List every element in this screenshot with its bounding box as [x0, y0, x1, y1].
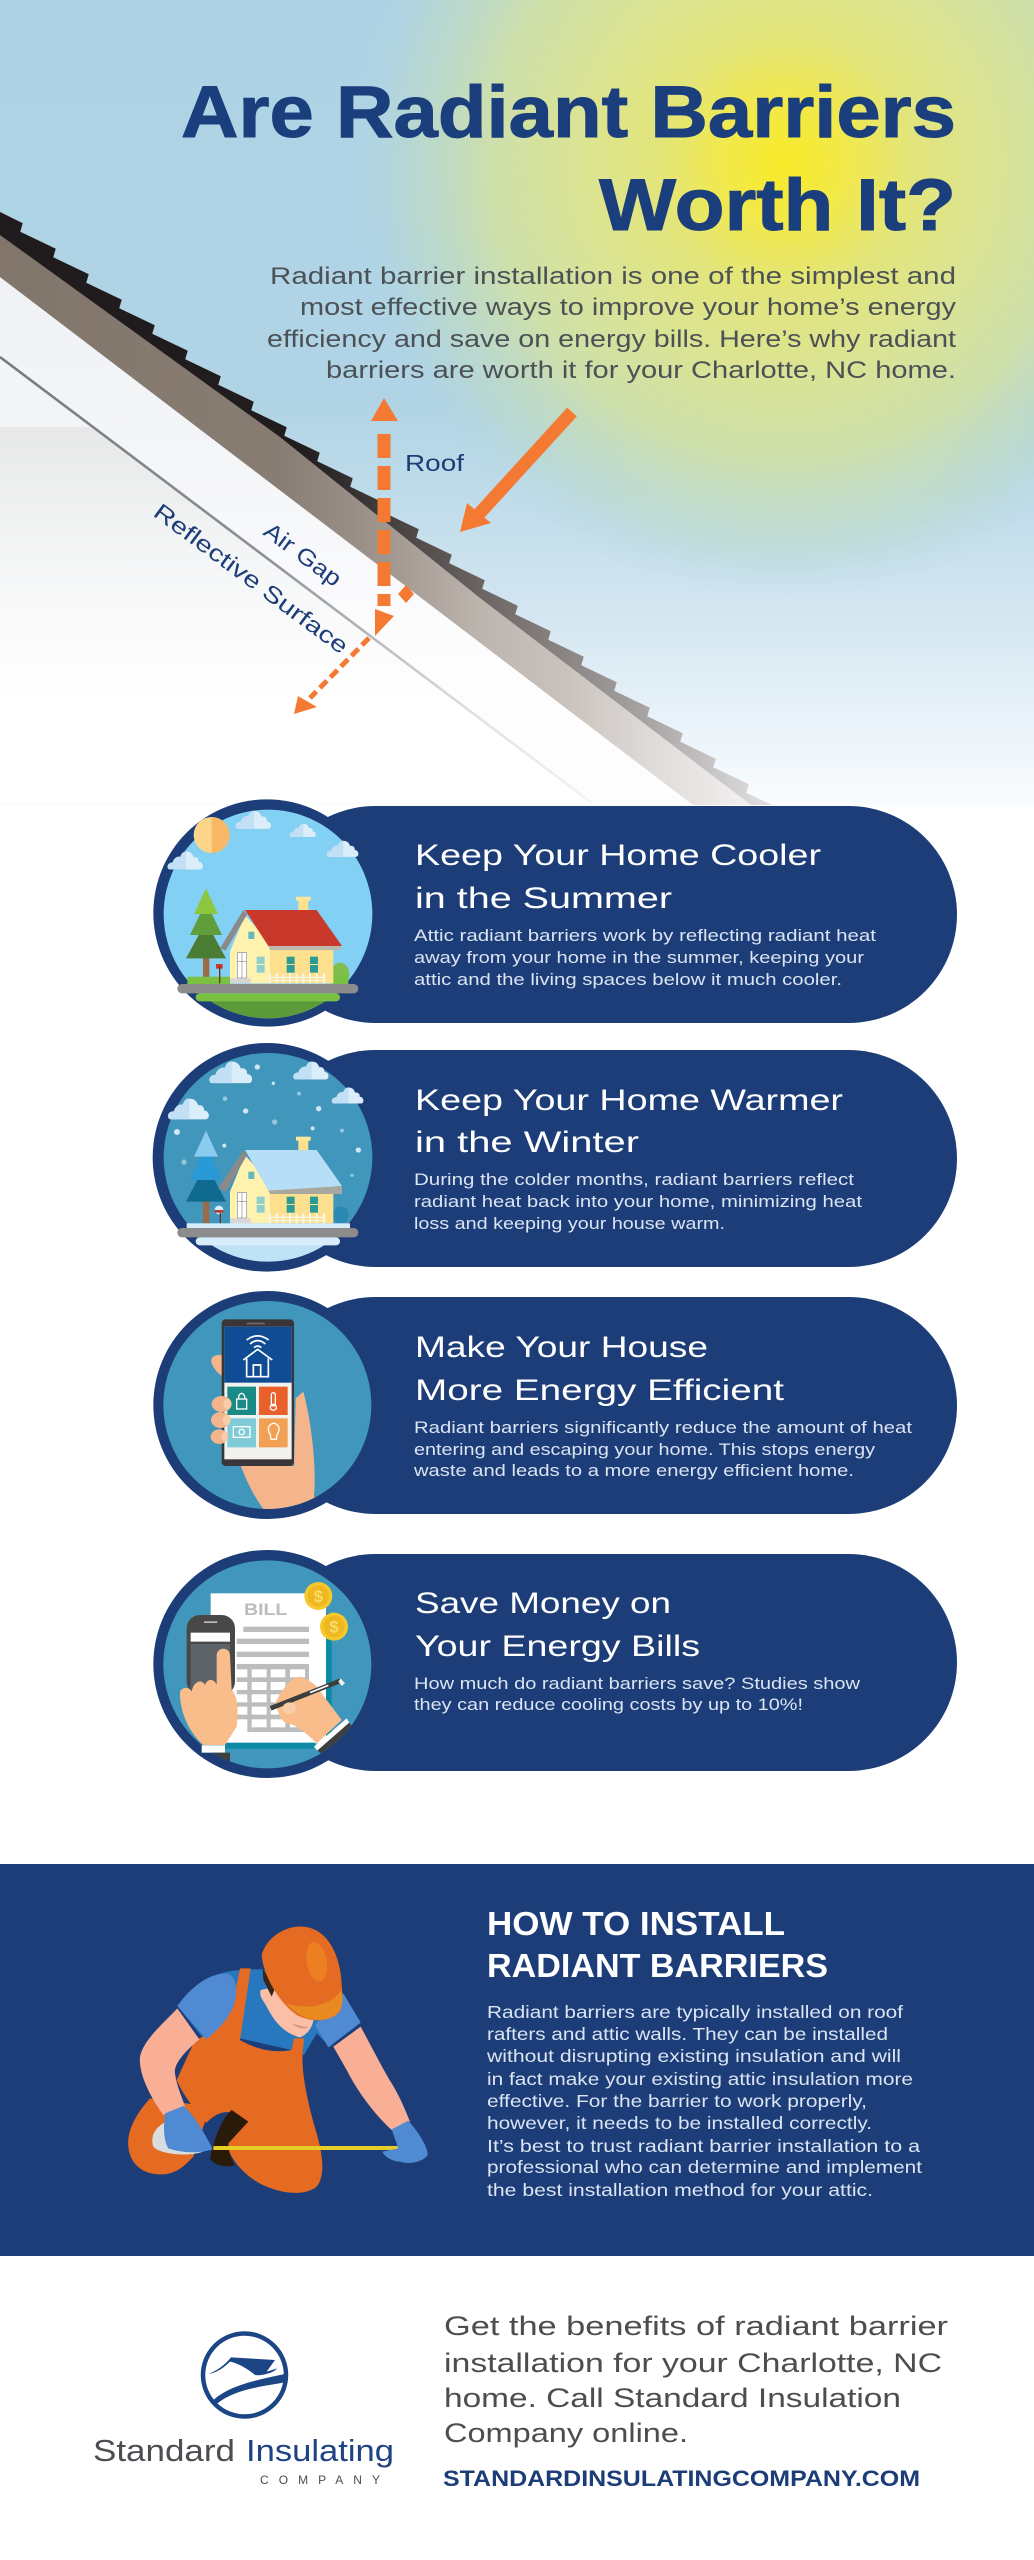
logo: Standard Insulating Company: COMPANY: [260, 2473, 380, 2487]
heading: [415, 1084, 843, 1159]
body text: It’s best to trust radiant barrier installation to a: [487, 2136, 920, 2156]
intro text block: [267, 263, 956, 384]
body text: in fact make your existing attic insulation more: [487, 2069, 913, 2089]
body text: Radiant barriers significantly reduce the amount of heat: [414, 1418, 912, 1437]
icon: bill and calculator: BILL: [244, 1600, 287, 1619]
heading: RADIANT BARRIERS: [487, 1947, 828, 1984]
body text: entering and escaping your home. This stops energy: [414, 1440, 876, 1459]
heading: in the Summer: [415, 882, 672, 915]
body text: rafters and attic walls. They can be installed: [487, 2024, 888, 2044]
heading: Save Money on: [415, 1587, 671, 1620]
heading: More Energy Efficient: [415, 1374, 785, 1407]
title: [181, 72, 956, 246]
roof cross-section illustration: [0, 212, 772, 805]
label: air gap: Air Gap: [259, 517, 347, 592]
call to action text: Get the benefits of radiant barrier: [444, 2311, 948, 2341]
heading: [487, 1905, 828, 1984]
heading: Keep Your Home Cooler: [415, 839, 821, 872]
intro text block: Radiant barrier installation is one of the simplest and: [270, 263, 956, 290]
heading: [415, 839, 821, 915]
call to action text: [444, 2311, 948, 2448]
hero background: sky and sun: [0, 0, 1034, 806]
logo: Standard Insulating Company: Standard: [93, 2433, 235, 2468]
panel: how to install radiant barriers: [0, 1864, 1034, 2256]
intro text block: most effective ways to improve your home’s energy: [300, 294, 956, 321]
heading: Make Your House: [415, 1331, 708, 1364]
body text: away from your home in the summer, keeping your: [414, 948, 864, 967]
arrow: dashed heat reflected upward and down: [294, 398, 414, 714]
website link text: STANDARDINSULATINGCOMPANY.COM: [443, 2466, 920, 2491]
band background: [0, 1864, 1034, 2256]
heading: [415, 1587, 700, 1663]
heading: Your Energy Bills: [415, 1630, 700, 1663]
heading: in the Winter: [415, 1126, 639, 1159]
icon: smart phone in hand: [153, 1291, 381, 1519]
icon: bill and calculator: $: [314, 1587, 324, 1606]
body text: loss and keeping your house warm.: [414, 1214, 725, 1233]
heading: HOW TO INSTALL: [487, 1905, 785, 1942]
label: roof: Roof: [405, 450, 465, 476]
body text: [414, 1170, 862, 1233]
body text: attic and the living spaces below it much cooler.: [414, 970, 842, 989]
body text: Radiant barriers are typically installed on roof: [487, 2002, 903, 2022]
body text: waste and leads to a more energy efficient home.: [413, 1461, 854, 1480]
body text: How much do radiant barriers save? Studies show: [414, 1674, 861, 1693]
arrow: incoming radiant heat: [460, 412, 572, 532]
body text: they can reduce cooling costs by up to 10%!: [414, 1695, 803, 1714]
logo: Standard Insulating Company: Insulating: [246, 2433, 394, 2468]
call to action text: home. Call Standard Insulation: [444, 2383, 901, 2413]
icon: summer house: [153, 799, 381, 1027]
call to action text: installation for your Charlotte, NC: [444, 2348, 942, 2378]
body text: [414, 926, 876, 989]
pill background: [267, 806, 957, 1023]
body text: [413, 1418, 912, 1480]
body text: effective. For the barrier to work properly,: [487, 2091, 867, 2111]
panel: make your house more energy efficient: [153, 1291, 957, 1519]
panel: keep your home cooler: [153, 799, 957, 1027]
body text: radiant heat back into your home, minimizing heat: [414, 1192, 862, 1211]
body text: [486, 2002, 922, 2200]
body text: [414, 1674, 861, 1714]
icon: bill and calculator: [153, 1550, 381, 1778]
body text: without disrupting existing insulation and will: [486, 2046, 901, 2066]
title: Are Radiant Barriers: [181, 72, 956, 153]
heading: Keep Your Home Warmer: [415, 1084, 843, 1117]
label: reflective surface: Reflective Surface: [149, 498, 353, 659]
heading: [415, 1331, 785, 1407]
call to action text: Company online.: [444, 2418, 688, 2448]
pill background: [267, 1297, 957, 1514]
icon: bill and calculator: $: [329, 1618, 339, 1637]
pill background: [267, 1050, 957, 1267]
logo: Standard Insulating Company: [93, 2334, 394, 2487]
body text: professional who can determine and implement: [487, 2157, 922, 2177]
panel: save money on energy bills: [153, 1550, 957, 1778]
pill background: [267, 1554, 957, 1771]
body text: During the colder months, radiant barriers reflect: [414, 1170, 854, 1189]
intro text block: barriers are worth it for your Charlotte, NC home.: [326, 357, 956, 384]
illustration: kneeling worker with tape measure: [128, 1927, 428, 2193]
intro text block: efficiency and save on energy bills. Here’s why radiant: [267, 326, 956, 353]
panel: keep your home warmer: [153, 1043, 957, 1273]
title: Worth It?: [599, 165, 956, 246]
body text: the best installation method for your attic.: [487, 2180, 873, 2200]
body text: however, it needs to be installed correctly.: [487, 2113, 872, 2133]
icon: winter house: [153, 1043, 381, 1273]
body text: Attic radiant barriers work by reflecting radiant heat: [414, 926, 876, 945]
